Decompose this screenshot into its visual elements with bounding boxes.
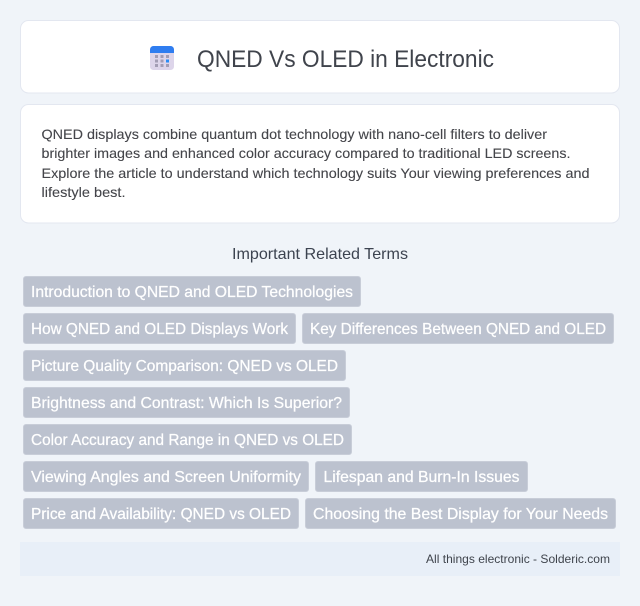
tag: picture quality xyxy=(24,350,346,380)
tag: choosing xyxy=(306,498,616,528)
icon: calendar xyxy=(150,46,174,70)
tag: viewing angles xyxy=(24,462,308,492)
tag: choosing: Choosing the Best Display for Your Needs xyxy=(313,506,608,523)
description text: lifestyle best. xyxy=(42,184,126,200)
description text: brighter images and enhanced color accuracy compared to traditional LED screens. xyxy=(42,145,570,161)
tag: lifespan xyxy=(316,462,528,492)
tag: color accuracy: Color Accuracy and Range in QNED vs OLED xyxy=(31,432,344,449)
tag: brightness: Brightness and Contrast: Which Is Superior? xyxy=(31,395,342,412)
tag: introduction: Introduction to QNED and OLED Technologies xyxy=(31,284,353,301)
tag: price xyxy=(24,498,298,528)
tag: brightness xyxy=(24,388,350,418)
footer text: All things electronic - Solderic.com xyxy=(426,552,610,566)
description text: Explore the article to understand which technology suits Your viewing preferences and xyxy=(42,165,590,181)
description text: QNED displays combine quantum dot technology with nano-cell filters to deliver xyxy=(42,126,547,142)
tag: viewing angles: Viewing Angles and Screen Uniformity xyxy=(31,469,301,486)
panel: description xyxy=(20,104,620,223)
tag: lifespan: Lifespan and Burn-In Issues xyxy=(324,469,520,486)
panel: title card xyxy=(20,20,620,93)
tag: introduction xyxy=(24,276,360,306)
tag: how displays work: How QNED and OLED Displays Work xyxy=(31,321,289,338)
footer xyxy=(20,542,620,576)
tag: key differences: Key Differences Between QNED and OLED xyxy=(310,321,606,338)
title: QNED Vs OLED in Electronic xyxy=(197,46,494,73)
tag: picture quality: Picture Quality Comparison: QNED vs OLED xyxy=(31,358,338,375)
related term tags xyxy=(24,276,616,528)
tag: how displays work xyxy=(24,314,296,344)
tag: key differences xyxy=(302,314,614,344)
heading: related terms: Important Related Terms xyxy=(232,246,408,263)
tag: color accuracy xyxy=(24,424,352,454)
description text xyxy=(42,126,590,200)
tag: price: Price and Availability: QNED vs OLED xyxy=(31,506,291,523)
